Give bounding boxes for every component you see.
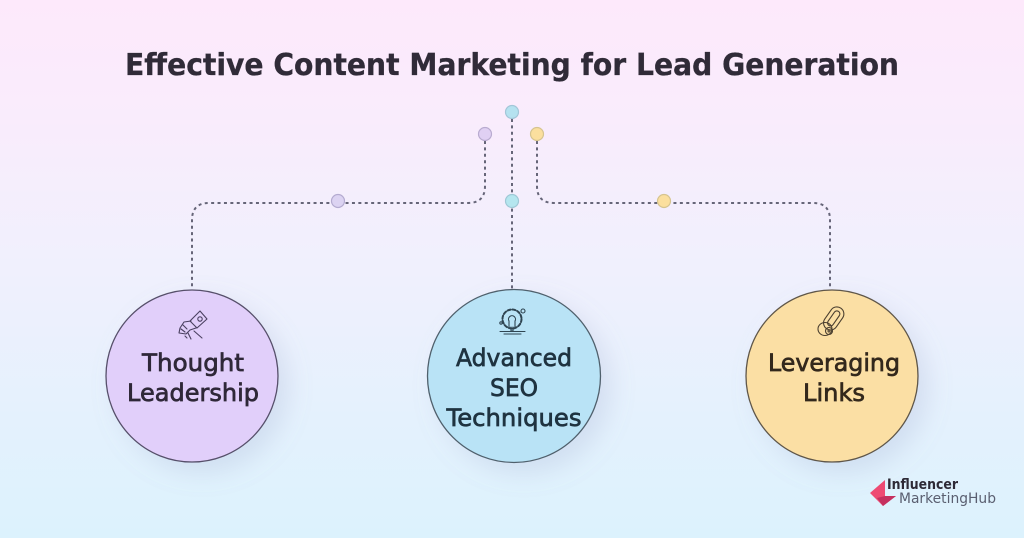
node: middle blue [506, 194, 518, 208]
logo: Influencer MarketingHub [870, 477, 996, 507]
panel: Leveraging Links [746, 290, 918, 462]
connector: right dotted line [537, 141, 830, 290]
label: Advanced SEO Techniques: Advanced [456, 344, 572, 372]
icon: logo diamond [870, 480, 896, 506]
node: middle purple [332, 194, 344, 208]
node: top blue [506, 106, 518, 118]
logo: Influencer MarketingHub: MarketingHub [899, 491, 996, 507]
node: middle yellow [658, 194, 670, 208]
node: top purple [478, 128, 492, 140]
connector: left dotted line [192, 141, 485, 290]
label: Advanced SEO Techniques: Techniques [445, 404, 582, 432]
label: Thought Leadership: Thought [141, 349, 244, 377]
connector: centre dotted line [511, 119, 513, 290]
node: top yellow [530, 128, 544, 140]
label: Leveraging Links: Links [803, 379, 865, 407]
panel: Advanced SEO Techniques [428, 290, 600, 462]
logo text: Influencer [887, 477, 959, 493]
label: Leveraging Links: Leveraging [768, 349, 900, 377]
title: Effective Content Marketing for Lead Generation [125, 48, 899, 83]
icon: gear with light bulb [500, 309, 525, 334]
panel: Thought Leadership [106, 290, 278, 462]
label: Advanced SEO Techniques: SEO [490, 374, 538, 402]
icon: chain link [818, 304, 847, 336]
label: Thought Leadership: Leadership [127, 379, 259, 407]
icon: hand holding banknote [179, 311, 207, 339]
